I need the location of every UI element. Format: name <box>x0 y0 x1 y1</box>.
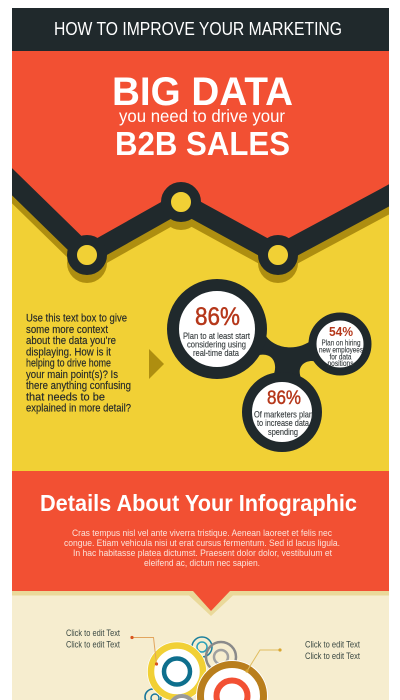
footer label right: Click to edit Text <box>305 651 360 661</box>
bubble: 86 percent real-time: considering using <box>187 340 246 350</box>
footer label right <box>305 641 360 659</box>
bubble: 54 percent hiring: for data <box>330 352 352 362</box>
bubble: 54 percent hiring: positions <box>328 359 354 368</box>
chart node 3 <box>263 240 293 270</box>
bubble: 86 percent spending: to increase data <box>257 418 309 428</box>
context text block: about the data you're <box>26 335 116 347</box>
line chart <box>2 172 399 270</box>
hero title: you need to drive your <box>119 106 285 126</box>
footer label left: Click to edit Text <box>66 640 120 650</box>
ring: grey <box>206 642 236 672</box>
bubble: 86 percent real-time: real-time data <box>193 348 239 358</box>
header bar <box>12 8 389 51</box>
context text block: helping to drive home <box>26 358 111 370</box>
context text block: there anything confusing <box>26 380 131 392</box>
bubble: 86 percent spending: Of marketers plan <box>254 410 313 420</box>
ring cluster <box>145 637 268 700</box>
hero title <box>114 77 292 156</box>
details paragraph <box>64 527 340 568</box>
leader line right <box>245 648 282 673</box>
pointer shadow band <box>12 591 389 616</box>
chart node 2 <box>166 187 196 217</box>
ring: lower teal <box>145 689 161 700</box>
bubble: 86 percent real-time: 86% <box>195 303 240 331</box>
bubble: 54 percent hiring <box>312 316 368 372</box>
bubble: 86 percent spending: 86% <box>267 388 301 409</box>
bubble cluster <box>173 285 368 447</box>
arrow <box>149 349 164 379</box>
bubble: 54 percent hiring: Plan on hiring <box>322 338 360 348</box>
context text block: your main point(s)? Is <box>26 369 118 381</box>
footer label right: Click to edit Text <box>305 640 360 650</box>
bubble: 86 percent real-time <box>173 285 261 373</box>
panel: red details <box>12 471 389 611</box>
ring: yellow and teal <box>147 642 207 700</box>
context text block <box>26 312 131 414</box>
context text block: Use this text box to give <box>26 312 127 324</box>
context text block: some more context <box>26 324 109 336</box>
bubble: 86 percent spending <box>247 377 317 447</box>
footer label left <box>66 630 120 648</box>
bubble: 86 percent spending: spending <box>268 427 298 437</box>
details paragraph: congue. Etiam vehicula nisi ut erat cursus fermentum. Sed id lacus ligula. <box>64 537 340 548</box>
details paragraph: eleifend ac, dictum nec sapien. <box>144 557 260 568</box>
header title: HOW TO IMPROVE YOUR MARKETING <box>54 18 342 39</box>
details heading: Details About Your Infographic <box>40 490 357 516</box>
ring: lower grey <box>170 694 194 700</box>
panel: red hero background <box>12 51 389 255</box>
footer label left: Click to edit Text <box>66 628 120 638</box>
context text block: that needs to be <box>26 392 105 404</box>
ring: brown and red <box>196 660 268 700</box>
panel: yellow background <box>12 204 389 471</box>
hero title: BIG DATA <box>112 70 293 114</box>
chart node 1 <box>72 240 102 270</box>
details paragraph: Cras tempus nisl vel ante viverra tristique. Aenean laoreet et felis nec <box>72 527 332 538</box>
bubble: 86 percent real-time: Plan to at least start <box>183 331 250 341</box>
leader line left <box>130 636 158 666</box>
ring: small teal <box>192 637 212 657</box>
context text block: displaying. How is it <box>26 346 112 358</box>
panel: beige footer <box>12 591 389 700</box>
details paragraph: In hac habitasse platea dictumst. Praesent dolor dolor, vestibulum et <box>73 547 332 558</box>
bubble: 54 percent hiring: 54% <box>329 325 353 339</box>
line chart shadow <box>12 196 389 283</box>
bubble: 54 percent hiring: new employees <box>319 346 363 354</box>
hero title: B2B SALES <box>115 126 290 163</box>
context text block: explained in more detail? <box>26 402 131 414</box>
bubble connector <box>260 336 314 376</box>
